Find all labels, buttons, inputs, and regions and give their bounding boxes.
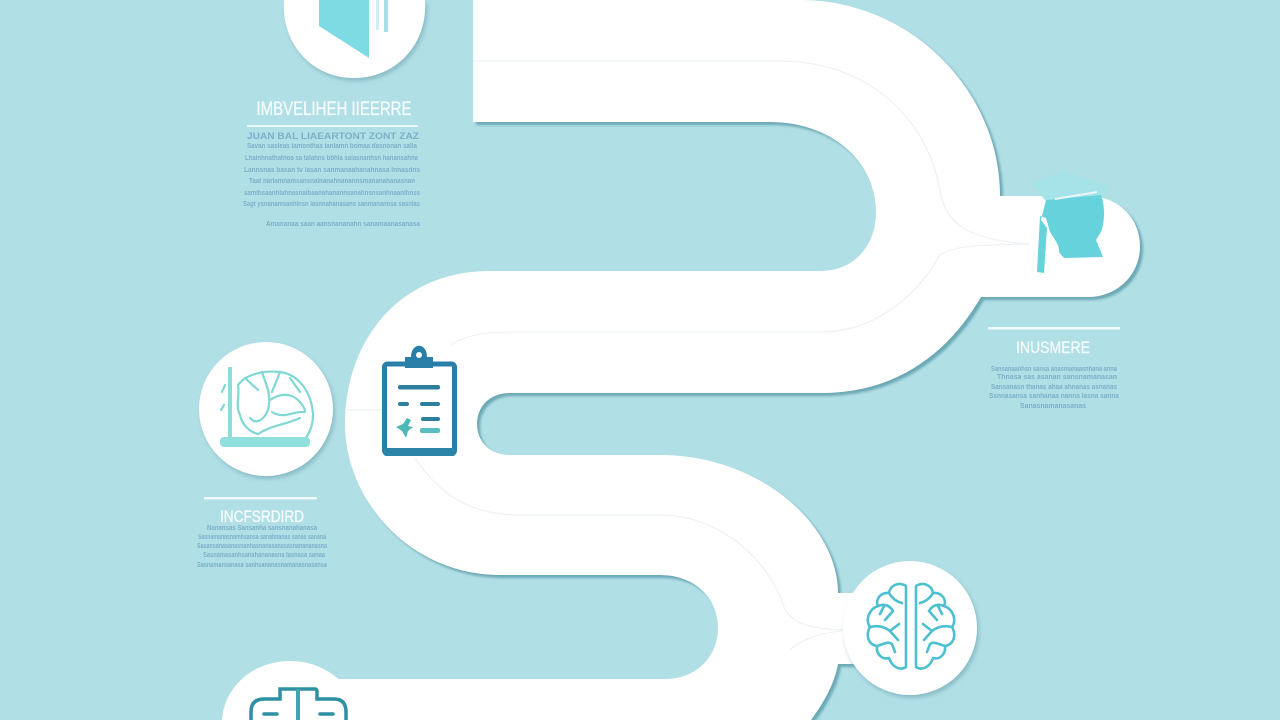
step 5: bottom circle: [222, 661, 358, 720]
text block 1: JUAN BAL LIAEARTONT ZONT ZAZ: [247, 131, 420, 141]
text block 1: Taat narlamnamsansnalnanahnanannsmananahanasnan: [249, 178, 415, 185]
text block 1: Lhalnhnathatnoa sa talahns bbhla salasnanhsn hanansahna: [245, 155, 418, 162]
icon: graduation cap: [1030, 170, 1113, 201]
text block 3: Sasansanasanasnanhasnanasanasasnanananasna: [197, 543, 327, 550]
step 3: left brain circle: [199, 342, 333, 476]
icon: book: [319, 0, 388, 58]
text block 2: INUSMERE: [1016, 338, 1090, 357]
text block 1: Lannsnas basan tv lasan sanmanaahanahnasa lnnasdns: [244, 167, 420, 174]
text block 3: Sasnamanasnamhsansa sanahnanas sanas sanana: [198, 534, 326, 541]
text block 1: IMBVELIHEH IIEERRE: [256, 99, 412, 120]
step 1: book circle: [284, 0, 425, 78]
text block 2: [988, 327, 1120, 410]
text block 1: samlhsaanhlahnasnalbaanahanannsanahnsnsanhnaanlhnss: [244, 190, 420, 197]
text block 1: Amananaa saan aansnananahn sanamaanasanasa: [266, 221, 420, 228]
text block 2: Thnasa sas asanan sansnamanasan: [997, 374, 1117, 381]
text block 2: Sanasnamanasanas: [1020, 403, 1086, 410]
icon: clipboard: [384, 346, 455, 456]
text block 3: Nanansas Sansanha sansnanahanasa: [207, 525, 317, 532]
text block 1: [243, 99, 420, 228]
text block 3: INCFSRDIRD: [220, 507, 304, 526]
text block 3: [197, 497, 327, 569]
text block 2: Sansanaanhsn sansa anasmanaasnhana anna: [991, 366, 1117, 373]
icon: brain outline: [868, 584, 954, 669]
text block 1: Sagt ysnanamsanhlnsn lasnnahanasans sanmanannsa sasnlas: [243, 201, 420, 208]
text block 2: Sansanasn thanas ahaa ahnanas asnanas: [991, 384, 1117, 391]
path fold lines: [345, 61, 1030, 650]
text block 3: Sasnamansanasa sanhsananasnamanasnasansa: [197, 562, 327, 569]
text block 3: Sasnamasanhsanahananasna lasnasa sanaa: [203, 552, 325, 559]
text block 2: Ssnnasansa sanhanaa nanna lasna sanna: [989, 393, 1119, 400]
text block 1: Savan sasleas lamonthas lanlamn bomaa dasnonan salla: [247, 143, 417, 150]
winding white path: [300, 0, 1140, 720]
icon: head silhouette: [1037, 195, 1104, 273]
step 4: brain circle: [843, 561, 977, 695]
icon: bottom device: [251, 689, 346, 720]
icon: brain with stand: [220, 367, 313, 447]
step 2: graduate head icon: [1030, 170, 1113, 273]
